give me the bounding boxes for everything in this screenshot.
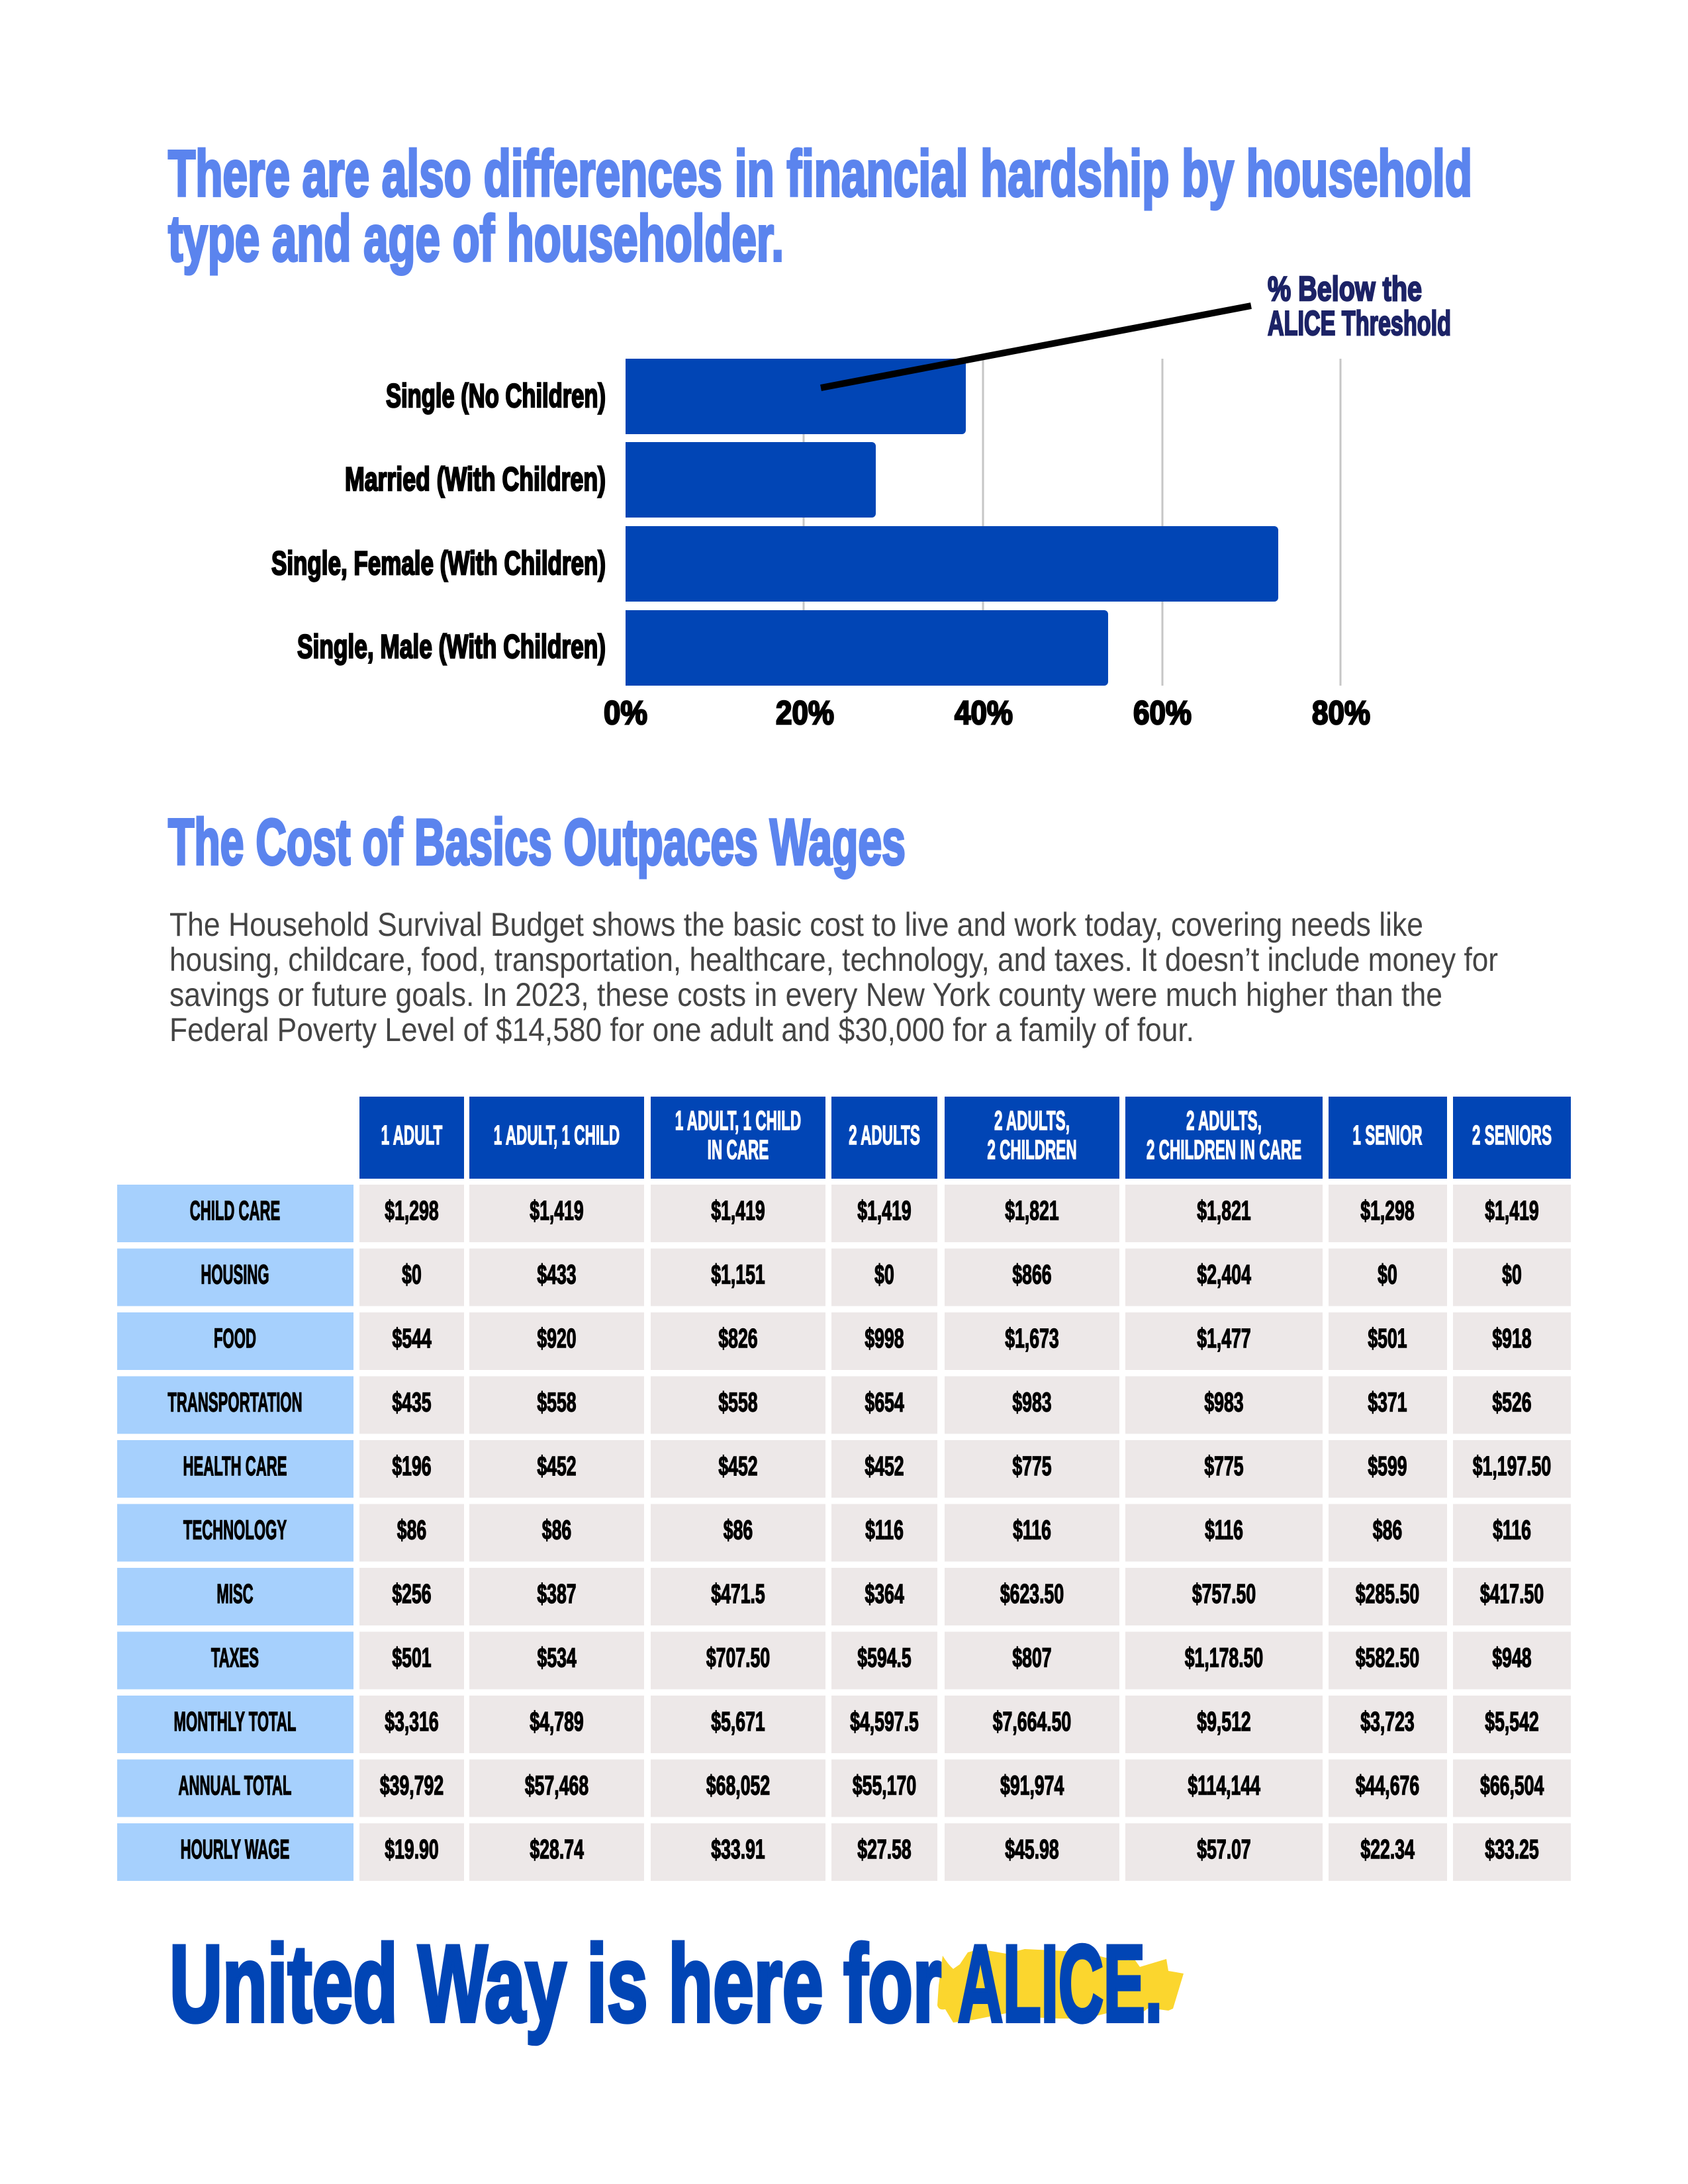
- text block: Household Survival Budget description: [169, 906, 1498, 1048]
- row: Housing: $1,151: [711, 1260, 765, 1290]
- row: Misc: $387: [537, 1579, 577, 1609]
- table header row: 1 ADULT: [381, 1120, 442, 1151]
- row: Annual Total: $57,468: [525, 1771, 588, 1801]
- bar: Single (No Children): [626, 359, 966, 434]
- row: Food: $998: [865, 1324, 904, 1353]
- row: Health Care: $775: [1012, 1451, 1052, 1481]
- row: Annual Total: $39,792: [380, 1771, 444, 1801]
- table header row: 1 ADULT, 1 CHILD: [494, 1120, 620, 1151]
- axis labels: 20%: [776, 694, 834, 731]
- table header row: 2 ADULTS,: [1186, 1106, 1262, 1136]
- row: Hourly Wage: $27.58: [857, 1835, 912, 1864]
- row: Technology: $116: [865, 1516, 904, 1545]
- row: Child Care: $1,298: [385, 1196, 439, 1226]
- row: Annual Total: $66,504: [1480, 1771, 1544, 1801]
- category labels: Married (With Children): [345, 461, 606, 498]
- row: Monthly Total: $3,316: [385, 1707, 439, 1737]
- row: Monthly Total: $4,597.5: [850, 1707, 919, 1737]
- row: Housing: $0: [874, 1260, 894, 1290]
- row: Child Care: CHILD CARE: [190, 1195, 280, 1226]
- row: Health Care: $196: [392, 1451, 432, 1481]
- row: Health Care: $452: [865, 1451, 904, 1481]
- table header row: 2 ADULTS: [849, 1120, 920, 1151]
- arrow: callout line to bar: [821, 306, 1251, 388]
- row: Monthly Total: $4,789: [530, 1707, 584, 1737]
- row: Hourly Wage: $33.25: [1485, 1835, 1539, 1864]
- row: Transportation: $435: [392, 1388, 432, 1418]
- row: Food: $1,477: [1197, 1324, 1251, 1353]
- row: Hourly Wage: HOURLY WAGE: [181, 1834, 289, 1864]
- row: Child Care: [117, 1185, 1571, 1242]
- row: Misc: MISC: [216, 1578, 254, 1609]
- table header row: 1 SENIOR: [1352, 1120, 1423, 1151]
- row: Hourly Wage: $57.07: [1197, 1835, 1251, 1864]
- row: Annual Total: $55,170: [853, 1771, 916, 1801]
- row: Misc: [117, 1568, 1571, 1625]
- row: Transportation: $558: [718, 1388, 758, 1418]
- row: Housing: $433: [537, 1260, 577, 1290]
- row: Child Care: $1,419: [711, 1196, 765, 1226]
- row: Misc: $471.5: [711, 1579, 765, 1609]
- row: Food: $918: [1492, 1324, 1532, 1353]
- row: Health Care: $452: [537, 1451, 577, 1481]
- row: Hourly Wage: $33.91: [711, 1835, 765, 1864]
- axis labels: 40%: [955, 694, 1013, 731]
- row: Food: FOOD: [214, 1323, 256, 1353]
- row: Food: $501: [1368, 1324, 1407, 1353]
- row: Taxes: $807: [1012, 1643, 1052, 1673]
- row: Transportation: $558: [537, 1388, 577, 1418]
- text block: Household Survival Budget description: savings or future goals. In 2023, these costs in every New York county were much higher than the: [169, 976, 1442, 1013]
- row: Misc: $364: [865, 1579, 904, 1609]
- table header row: 2 CHILDREN IN CARE: [1147, 1135, 1301, 1165]
- row: Hourly Wage: $22.34: [1360, 1835, 1415, 1864]
- row: Annual Total: $68,052: [706, 1771, 770, 1801]
- row: Housing: $866: [1012, 1260, 1052, 1290]
- row: Monthly Total: $3,723: [1360, 1707, 1415, 1737]
- text block: Household Survival Budget description: Federal Poverty Level of $14,580 for one adult and $30,000 for a family of four.: [169, 1011, 1194, 1048]
- row: Misc: $285.50: [1356, 1579, 1419, 1609]
- row: Child Care: $1,821: [1197, 1196, 1251, 1226]
- axis labels: 80%: [1312, 694, 1370, 731]
- axis labels: 0%: [604, 694, 647, 731]
- row: Housing: $0: [1502, 1260, 1522, 1290]
- row: Child Care: $1,419: [1485, 1196, 1539, 1226]
- bar chart: percent below ALICE threshold by household type: [271, 359, 1370, 731]
- row: Taxes: $582.50: [1356, 1643, 1419, 1673]
- category labels: Single (No Children): [386, 377, 606, 414]
- category labels: Single, Male (With Children): [297, 628, 606, 665]
- row: Hourly Wage: [117, 1823, 1571, 1881]
- title: financial hardship heading: type and age of householder.: [168, 202, 784, 275]
- row: Annual Total: [117, 1759, 1571, 1817]
- table header row: [359, 1097, 1571, 1179]
- table header row: 2 CHILDREN: [987, 1135, 1077, 1165]
- row: Taxes: TAXES: [211, 1642, 259, 1672]
- row: Monthly Total: $5,542: [1485, 1707, 1539, 1737]
- row: Monthly Total: [117, 1696, 1571, 1753]
- row: Food: $544: [393, 1324, 432, 1353]
- category labels: [271, 377, 606, 665]
- row: Misc: $757.50: [1192, 1579, 1256, 1609]
- row: Taxes: $501: [392, 1643, 432, 1673]
- icon: yellow brush highlight: [937, 1949, 1184, 2023]
- row: Annual Total: $44,676: [1356, 1771, 1419, 1801]
- row: Health Care: $775: [1204, 1451, 1244, 1481]
- row: Taxes: $534: [538, 1643, 577, 1673]
- text block: Household Survival Budget description: housing, childcare, food, transportation, healthcare, technology, and taxes. It doesn’t include money for: [169, 941, 1498, 978]
- headline: United Way is here for ALICE.: ALICE.: [958, 1923, 1162, 2044]
- row: Taxes: $948: [1492, 1643, 1532, 1673]
- row: Technology: $86: [724, 1516, 753, 1545]
- row: Hourly Wage: $45.98: [1005, 1835, 1059, 1864]
- row: Misc: $417.50: [1480, 1579, 1544, 1609]
- row: Misc: $623.50: [1000, 1579, 1064, 1609]
- title: financial hardship heading: [168, 137, 1472, 275]
- row: Food: $826: [718, 1324, 758, 1353]
- table: Household Survival Budget: [117, 1097, 1571, 1881]
- row: Annual Total: $91,974: [1000, 1771, 1064, 1801]
- row: Transportation: $526: [1492, 1388, 1532, 1418]
- category labels: Single, Female (With Children): [271, 545, 606, 582]
- row: Food: $1,673: [1005, 1324, 1059, 1353]
- row: Child Care: $1,821: [1005, 1196, 1059, 1226]
- row: Taxes: $707.50: [706, 1643, 770, 1673]
- row: Monthly Total: $7,664.50: [993, 1707, 1071, 1737]
- row: Housing: [117, 1248, 1571, 1306]
- row: Taxes: $1,178.50: [1185, 1643, 1263, 1673]
- row: Transportation: TRANSPORTATION: [167, 1387, 303, 1417]
- headline: United Way is here for ALICE.: United Way is here for: [169, 1923, 941, 2044]
- heading: The Cost of Basics Outpaces Wages: The Cost of Basics Outpaces Wages: [168, 805, 906, 878]
- row: Housing: HOUSING: [201, 1259, 269, 1289]
- callout: % Below the ALICE Threshold: ALICE Threshold: [1268, 304, 1451, 343]
- row: Technology: $116: [1013, 1516, 1051, 1545]
- row: Health Care: HEALTH CARE: [183, 1451, 287, 1481]
- callout: % Below the ALICE Threshold: [1268, 270, 1451, 343]
- axis labels: 60%: [1133, 694, 1192, 731]
- row: Taxes: [117, 1632, 1571, 1689]
- row: Child Care: $1,298: [1360, 1196, 1415, 1226]
- row: Health Care: $452: [718, 1451, 758, 1481]
- row: Hourly Wage: $28.74: [530, 1835, 584, 1864]
- row: Technology: $86: [1373, 1516, 1402, 1545]
- table header row: 2 ADULTS,: [994, 1106, 1070, 1136]
- table header row: 2 SENIORS: [1472, 1120, 1552, 1151]
- bar: Married (With Children): [626, 442, 876, 518]
- row: Food: $920: [537, 1324, 577, 1353]
- row: Transportation: [117, 1377, 1571, 1433]
- row: Monthly Total: $9,512: [1197, 1707, 1251, 1737]
- axis labels: [604, 694, 1370, 731]
- row: Hourly Wage: $19.90: [385, 1835, 439, 1864]
- row: Technology: TECHNOLOGY: [183, 1514, 287, 1545]
- row: Taxes: $594.5: [857, 1643, 912, 1673]
- bar: Single, Male (With Children): [626, 610, 1108, 686]
- row: Technology: $116: [1205, 1516, 1243, 1545]
- row: Annual Total: ANNUAL TOTAL: [179, 1770, 291, 1800]
- table header row: 1 ADULT, 1 CHILD: [675, 1106, 801, 1136]
- row: Transportation: $371: [1368, 1388, 1407, 1418]
- table header row: IN CARE: [708, 1135, 769, 1165]
- row: Transportation: $983: [1204, 1388, 1244, 1418]
- row: Technology: $116: [1493, 1516, 1531, 1545]
- row: Misc: $256: [392, 1579, 432, 1609]
- row: Transportation: $654: [865, 1388, 904, 1418]
- text block: Household Survival Budget description: The Household Survival Budget shows the basic cost to live and work today, covering needs like: [169, 906, 1423, 943]
- row: Child Care: $1,419: [857, 1196, 912, 1226]
- row: Health Care: $1,197.50: [1473, 1451, 1551, 1481]
- row: Housing: $0: [402, 1260, 422, 1290]
- row: Food: [117, 1312, 1571, 1370]
- row: Technology: [117, 1504, 1571, 1562]
- row: Monthly Total: $5,671: [711, 1707, 765, 1737]
- row: Child Care: $1,419: [530, 1196, 584, 1226]
- row: Health Care: $599: [1368, 1451, 1407, 1481]
- row: Health Care: [117, 1440, 1571, 1498]
- row: Housing: $0: [1378, 1260, 1397, 1290]
- callout: % Below the ALICE Threshold: % Below the: [1268, 270, 1422, 308]
- row: Technology: $86: [397, 1516, 426, 1545]
- row: Monthly Total: MONTHLY TOTAL: [174, 1706, 296, 1737]
- row: Annual Total: $114,144: [1188, 1771, 1261, 1801]
- row: Housing: $2,404: [1197, 1260, 1251, 1290]
- bar: Single, Female (With Children): [626, 526, 1278, 602]
- row: Technology: $86: [542, 1516, 571, 1545]
- row: Transportation: $983: [1012, 1388, 1052, 1418]
